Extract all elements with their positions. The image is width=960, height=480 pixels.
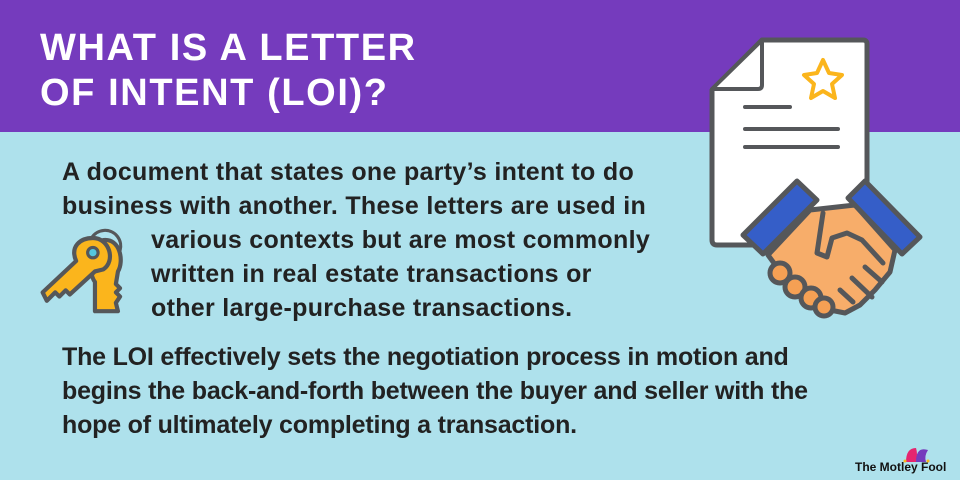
text: process: begins the back-and-forth between the buyer and seller with the [62,377,808,405]
text: definition: A document that states one party’s intent to do [62,158,634,186]
text: definition: other large-purchase transactions. [151,294,572,322]
text: definition: various contexts but are most commonly [151,226,650,254]
text: definition: business with another. These letters are used in [62,192,646,220]
title: OF INTENT (LOI)? [40,72,389,114]
text: process: hope of ultimately completing a transaction. [62,411,577,439]
header band [0,0,960,132]
icon: document with handshake [710,38,922,318]
text: definition: written in real estate transactions or [151,260,592,288]
text: definition [62,158,650,322]
text: process [62,343,808,439]
logo: The Motley Fool [855,448,946,474]
logo: The Motley Fool: The Motley Fool [855,460,946,474]
title [40,27,417,114]
icon: keys [40,228,123,314]
title: WHAT IS A LETTER [40,27,417,69]
text: process: The LOI effectively sets the negotiation process in motion and [62,343,789,371]
